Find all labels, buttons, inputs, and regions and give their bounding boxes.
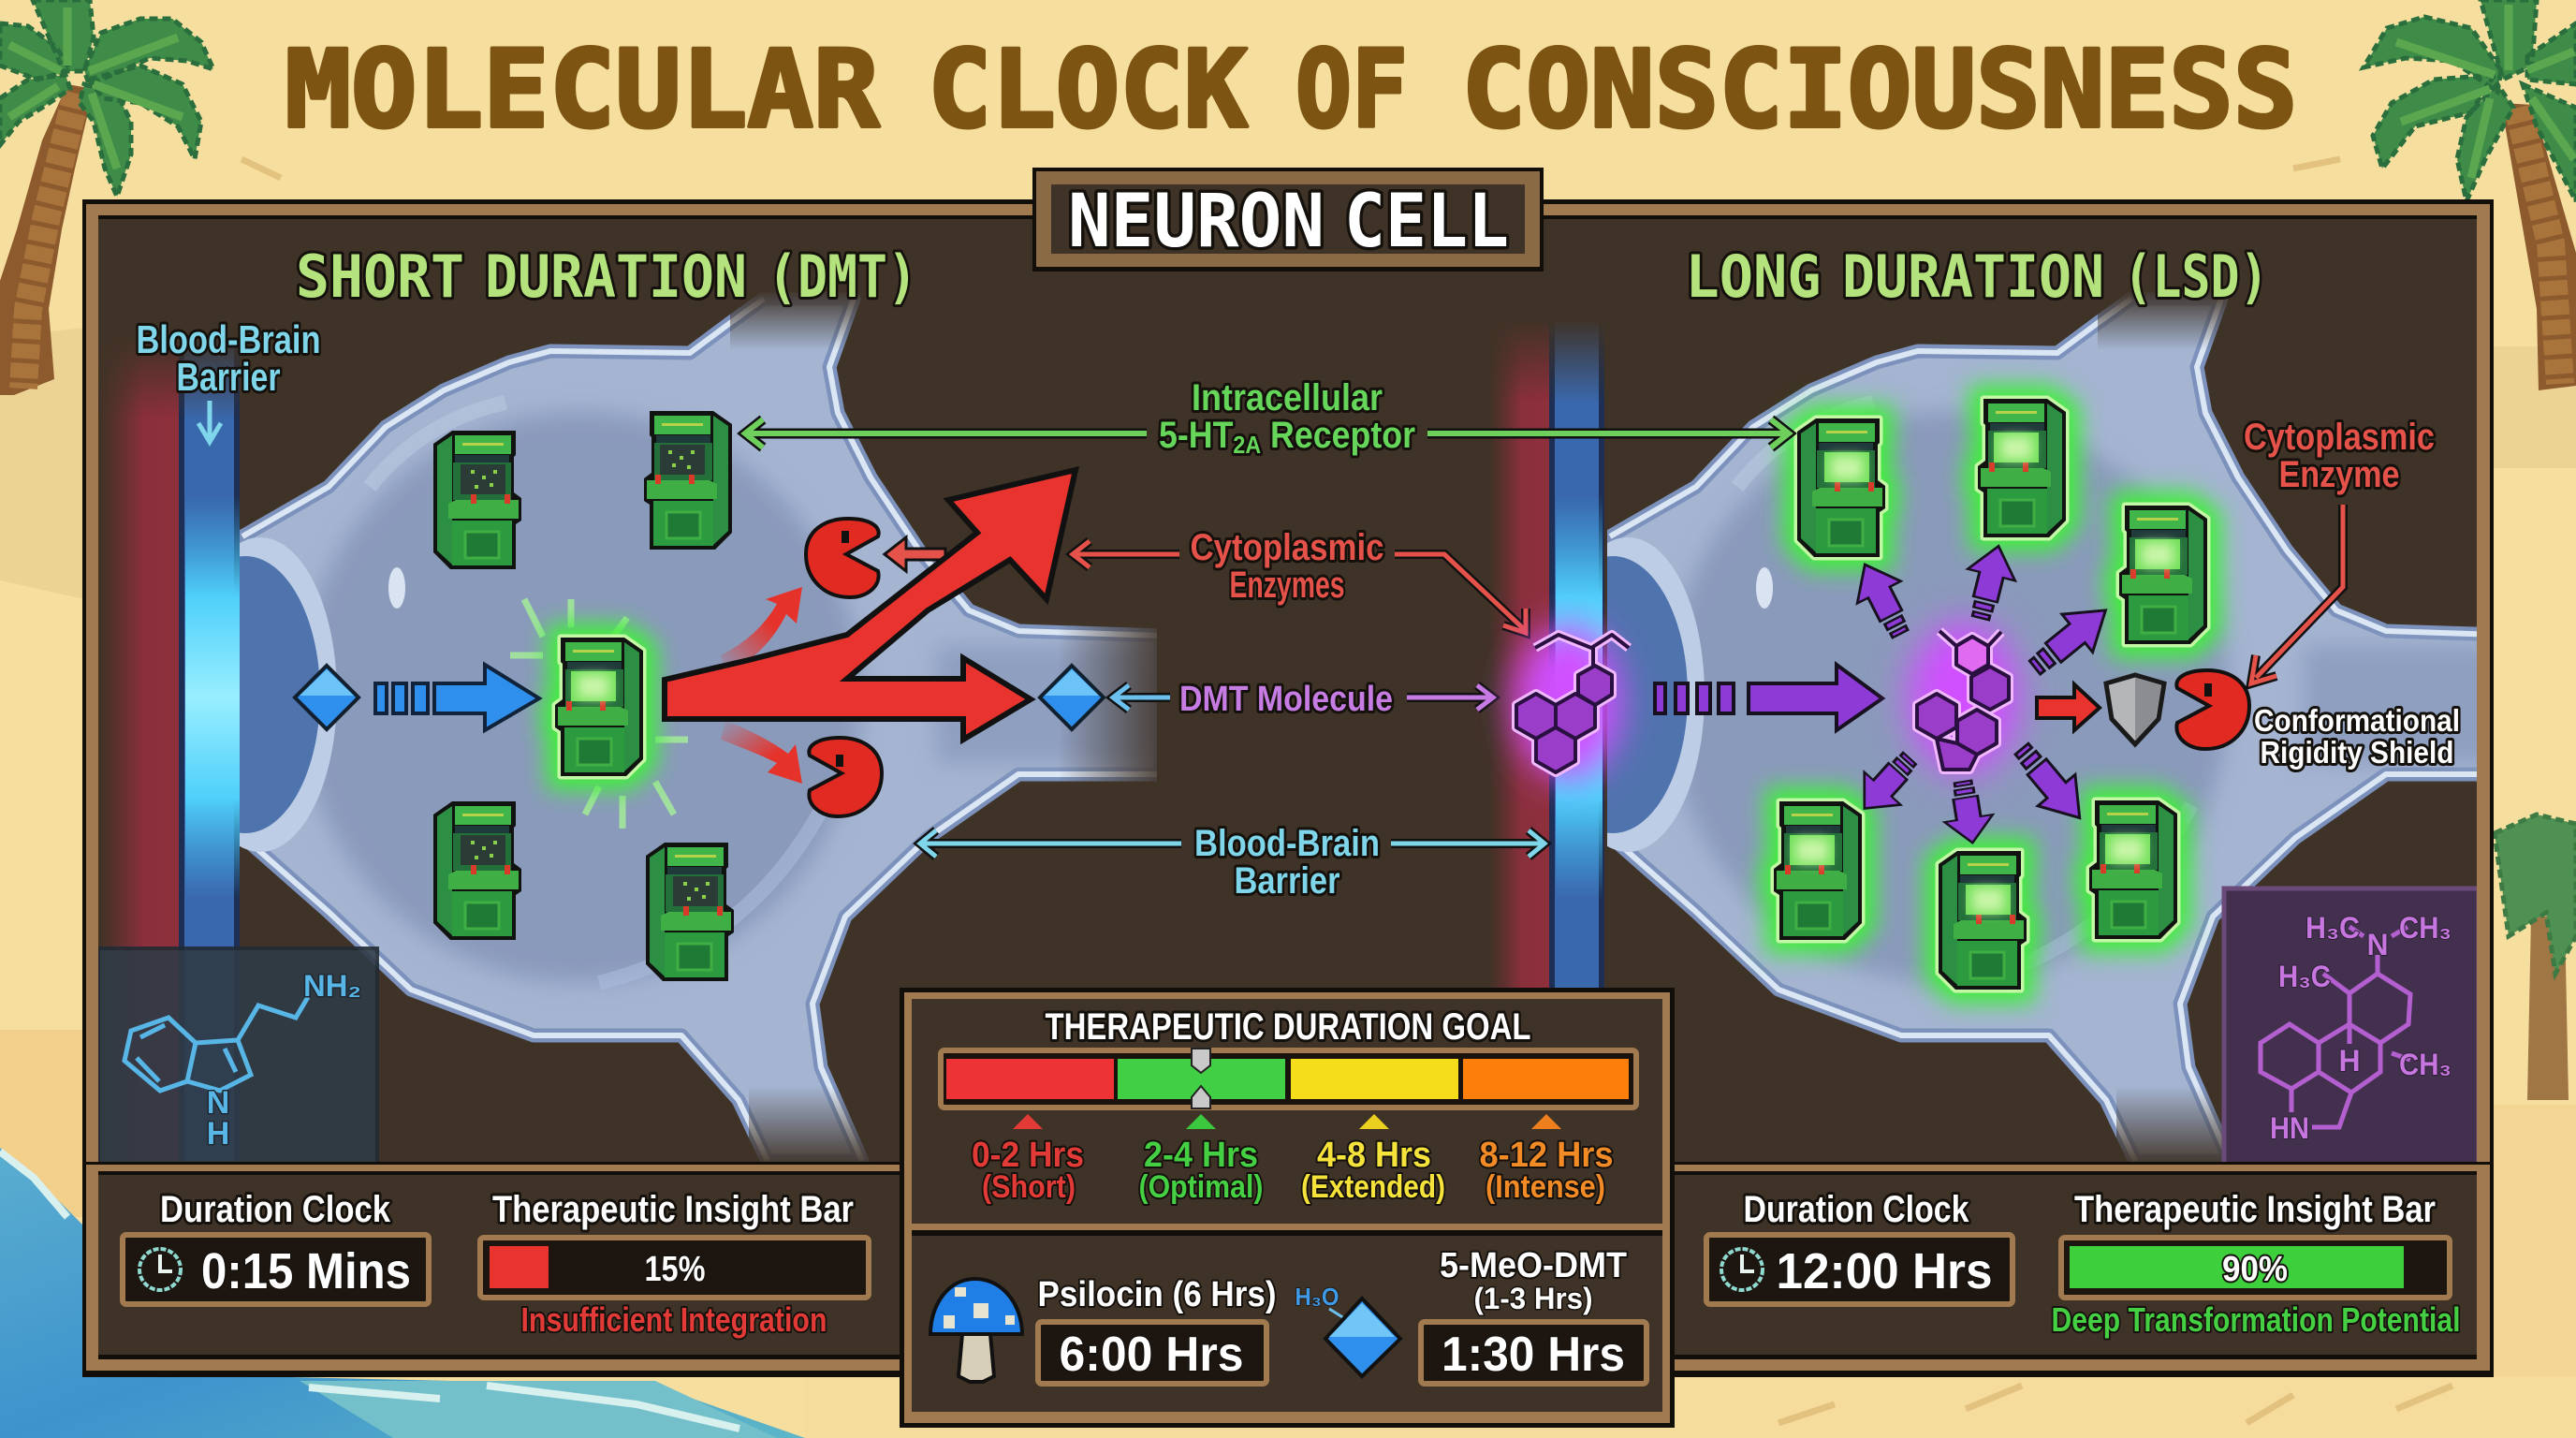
label: intracellular receptor: Receptor	[1261, 415, 1415, 456]
insight bar right: Deep Transformation Potential	[2052, 1300, 2460, 1339]
title: CLOCK	[928, 27, 1248, 152]
neuron cell plate	[1032, 168, 1544, 271]
title: CONSCIOUSNESS	[1462, 27, 2297, 152]
5-MeO-DMT readout: 1:30 Hrs	[1442, 1328, 1625, 1382]
duration clock right	[1706, 1189, 2012, 1304]
5-MeO-DMT readout	[1421, 1246, 1647, 1384]
LSD structure panel: CH₃	[2399, 911, 2452, 945]
label: DMT molecule: DMT Molecule	[1179, 680, 1393, 719]
5-MeO-DMT readout: (1-3 Hrs)	[1473, 1282, 1593, 1315]
insight bar right: 90%	[2222, 1250, 2288, 1289]
palm tree: top right	[2364, 0, 2576, 390]
psilocin readout: Psilocin (6 Hrs)	[1037, 1275, 1277, 1314]
label: intracellular receptor	[745, 377, 1789, 459]
insight bar left: 15%	[644, 1250, 706, 1289]
purple activation arrows	[1843, 540, 2121, 846]
label: blood-brain barrier center	[920, 823, 1544, 902]
neuron cell plate: CELL	[1344, 180, 1509, 264]
heading: short duration: SHORT	[296, 242, 464, 311]
insight bar right	[2052, 1189, 2460, 1339]
heading: short duration	[296, 242, 917, 311]
small red degradation arrows	[721, 537, 945, 784]
heading: long duration: LONG	[1685, 242, 1822, 311]
psilocin readout	[1037, 1275, 1277, 1384]
range labels	[972, 1136, 1614, 1205]
neuron cell plate: NEURON	[1068, 180, 1325, 264]
insight bar right: Therapeutic Insight Bar	[2074, 1189, 2436, 1230]
DMT molecule gem, left	[295, 666, 359, 729]
duration clock left: 0:15 Mins	[201, 1243, 411, 1299]
LSD structure panel	[2224, 888, 2479, 1167]
duration clock left: Duration Clock	[160, 1189, 391, 1230]
icon: mushroom	[930, 1279, 1022, 1382]
duration scale	[941, 1049, 1636, 1129]
palm tree: top left	[0, 0, 213, 395]
label: cytoplasmic enzyme right: Cytoplasmic	[2244, 417, 2435, 458]
range labels: (Intense)	[1486, 1169, 1605, 1205]
glowing molecule in LSD neuron	[1908, 621, 2020, 774]
red arrow to shield	[2037, 684, 2100, 730]
DMT structure panel	[98, 948, 377, 1167]
range labels: 0-2 Hrs	[972, 1136, 1084, 1175]
big red arrows: rapid breakdown	[665, 470, 1076, 740]
duration clock right: Duration Clock	[1743, 1189, 1969, 1230]
heading: long duration: (LSD)	[2123, 242, 2269, 311]
left neuron	[240, 292, 1157, 1162]
LSD structure panel: H₃C	[2305, 911, 2360, 945]
heading: short duration: DURATION	[485, 242, 747, 311]
main frame	[82, 199, 2494, 1377]
label: conformational rigidity shield	[2254, 703, 2460, 770]
title	[285, 27, 2297, 152]
purple dashed arrow	[1655, 665, 1882, 730]
label: cytoplasmic enzymes: Cytoplasmic	[1191, 527, 1383, 568]
arcades: LSD side	[1774, 399, 2207, 990]
range labels: (Optimal)	[1138, 1169, 1264, 1205]
insight bar left: Therapeutic Insight Bar	[492, 1189, 854, 1230]
icon: rigidity shield	[2106, 675, 2164, 744]
heading: long duration	[1685, 242, 2269, 311]
heading: THERAPEUTIC DURATION GOAL	[1045, 1006, 1531, 1048]
label: DMT molecule	[1113, 680, 1493, 719]
label: blood-brain barrier top left: Blood-Brain	[137, 317, 320, 361]
LSD structure panel: HN	[2270, 1111, 2309, 1145]
label: cytoplasmic enzymes	[1073, 527, 1526, 633]
panel: therapeutic duration goal	[900, 988, 1675, 1428]
range labels: 8-12 Hrs	[1479, 1136, 1614, 1175]
label: blood-brain barrier center: Barrier	[1234, 860, 1340, 902]
arcades: DMT side	[433, 411, 734, 981]
duration clock right: 12:00 Hrs	[1777, 1243, 1992, 1299]
range labels: (Short)	[982, 1169, 1076, 1205]
label: intracellular receptor: 5-HT	[1159, 415, 1242, 456]
title: OF	[1295, 27, 1408, 152]
LSD structure panel: H	[2338, 1044, 2361, 1078]
duration clock left	[123, 1189, 429, 1304]
glowing molecule at barrier	[1514, 625, 1629, 779]
label: intracellular receptor: 2A	[1233, 431, 1261, 459]
LSD structure panel: CH₃	[2399, 1048, 2452, 1081]
left blood-brain barrier	[98, 335, 243, 1161]
LSD structure panel: H₃C	[2278, 960, 2331, 993]
LSD structure panel: N	[2366, 928, 2389, 961]
insight bar left: Insufficient Integration	[520, 1300, 827, 1339]
label: conformational rigidity shield: Rigidity Shield	[2260, 735, 2454, 770]
enzyme: LSD side	[2176, 670, 2249, 749]
panel: right stats	[1666, 1162, 2494, 1377]
range labels: 4-8 Hrs	[1317, 1136, 1431, 1175]
barriers and neurons	[98, 288, 2528, 1170]
5-MeO-DMT readout: 5-MeO-DMT	[1440, 1246, 1627, 1285]
heading: long duration: DURATION	[1842, 242, 2104, 311]
icon: H3O crystal: H₃O	[1295, 1283, 1339, 1311]
label: blood-brain barrier top left: Barrier	[176, 355, 281, 399]
label: blood-brain barrier top left	[137, 317, 320, 442]
center blood-brain barrier	[1492, 324, 1604, 988]
palm tree: lower right	[2495, 814, 2576, 1100]
label: cytoplasmic enzymes: Enzymes	[1230, 565, 1344, 606]
ocean corner	[0, 1148, 805, 1438]
arcade: activated DMT receptor	[510, 599, 688, 829]
heading: short duration: (DMT)	[768, 242, 917, 311]
range labels: 2-4 Hrs	[1144, 1136, 1258, 1175]
DMT molecule gem, right	[1040, 666, 1104, 729]
panel: left stats	[82, 1162, 906, 1377]
psilocin readout: 6:00 Hrs	[1060, 1328, 1243, 1382]
title: MOLECULAR	[285, 27, 880, 152]
DMT structure panel: NH₂	[303, 969, 361, 1003]
enzymes: DMT side	[806, 519, 882, 816]
range labels: (Extended)	[1301, 1169, 1445, 1205]
blue dashed arrow	[375, 665, 539, 730]
label: blood-brain barrier center: Blood-Brain	[1194, 823, 1380, 864]
DMT structure panel: H	[207, 1116, 229, 1152]
right neuron	[1607, 292, 2477, 1162]
icon: H3O crystal	[1295, 1283, 1400, 1376]
label: cytoplasmic enzyme right	[2244, 417, 2435, 683]
insight bar left	[480, 1189, 869, 1339]
label: cytoplasmic enzyme right: Enzyme	[2278, 454, 2400, 495]
DMT structure panel: N	[207, 1085, 229, 1121]
label: conformational rigidity shield: Conformational	[2254, 703, 2460, 738]
label: intracellular receptor: Intracellular	[1192, 377, 1383, 418]
